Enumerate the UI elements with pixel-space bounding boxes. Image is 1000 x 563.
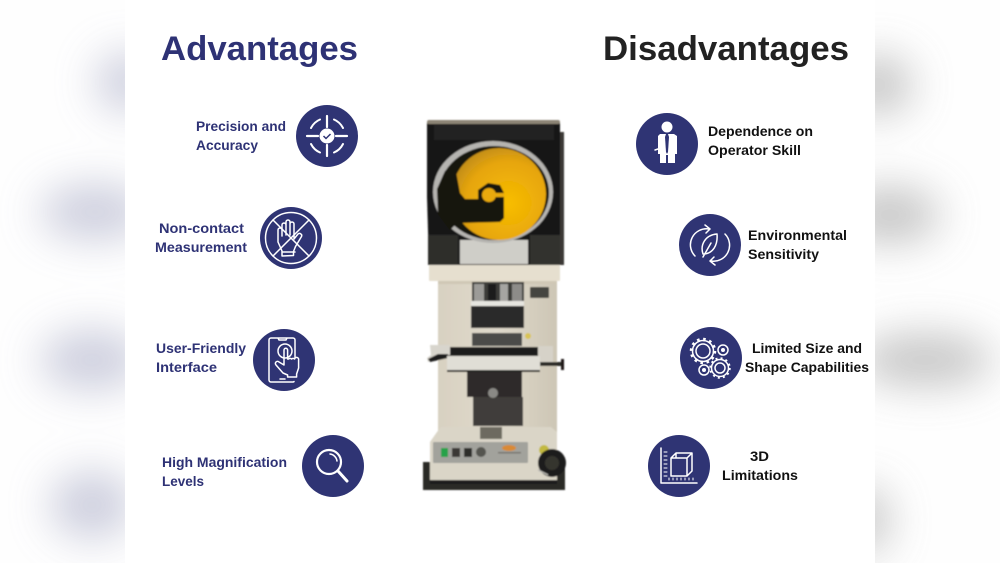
hood [427,120,560,265]
item: Limited Size and Shape Capabilities label [745,341,869,375]
item: Dependence on Operator Skill label: Operator Skill [708,143,801,158]
yellow screen [452,148,546,240]
under-stage block [467,372,522,397]
item: Non-contact Measurement label: Non-contact [159,221,245,236]
item: Environmental Sensitivity label: Environmental [748,228,847,243]
item: Environmental Sensitivity label: Sensitivity [748,247,820,262]
ring mount [460,240,528,264]
item: Limited Size and Shape Capabilities label: Shape Capabilities [745,360,869,375]
orange label [502,445,516,451]
heading: Disadvantages: Disadvantages [603,30,849,68]
mid block [472,333,522,346]
item: Precision and Accuracy label: Precision and [196,119,286,134]
item: User-Friendly Interface label [156,341,247,375]
large knob [539,445,549,455]
stage rail [447,347,539,356]
icon: leaf with cycle arrows [679,214,741,276]
icon: crossed-out hand [260,207,322,269]
beige band [429,265,560,281]
item: User-Friendly Interface label: Interface [156,360,218,375]
screen ring [433,141,553,243]
base body [430,427,557,480]
item: Non-contact Measurement label: Measurement [155,240,248,255]
black profile shape [437,166,504,230]
item: Limited Size and Shape Capabilities label: Limited Size and [752,341,862,356]
lens turret [472,282,524,328]
stage right knob [540,362,562,366]
projector base shadow [423,462,565,490]
photo: optical profile projector [423,120,566,490]
item: High Magnification Levels label [162,455,287,489]
stage plate [447,356,540,371]
item: Non-contact Measurement label [155,221,248,255]
item: Dependence on Operator Skill label [708,124,813,158]
item: User-Friendly Interface label: User-Friendly [156,341,247,356]
item: 3D Limitations label: Limitations [722,468,798,483]
item: Precision and Accuracy label [196,119,286,153]
stage left handle [427,345,450,362]
item: High Magnification Levels label: High Magnification [162,455,287,470]
background: blurred left strip [26,36,125,556]
icon: magnifying glass [302,435,364,497]
small label on column [530,287,549,298]
item: Dependence on Operator Skill label: Dependence on [708,124,813,139]
icon: target with check [296,105,358,167]
column [438,283,557,433]
item: 3D Limitations label [722,449,798,483]
green button [441,448,448,457]
icon: operator person [636,113,698,175]
background: blurred right strip [875,36,1000,563]
item: 3D Limitations label: 3D [750,449,769,464]
control panel [433,442,528,463]
item: High Magnification Levels label: Levels [162,474,204,489]
icon: phone with tapping hand [253,329,315,391]
icon: gears [680,327,742,389]
item: Environmental Sensitivity label [748,228,847,262]
heading: Advantages: Advantages [161,30,358,68]
foot strip [430,480,557,484]
icon: 3D cube with ruler axes [648,435,710,497]
item: Precision and Accuracy label: Accuracy [196,138,258,153]
